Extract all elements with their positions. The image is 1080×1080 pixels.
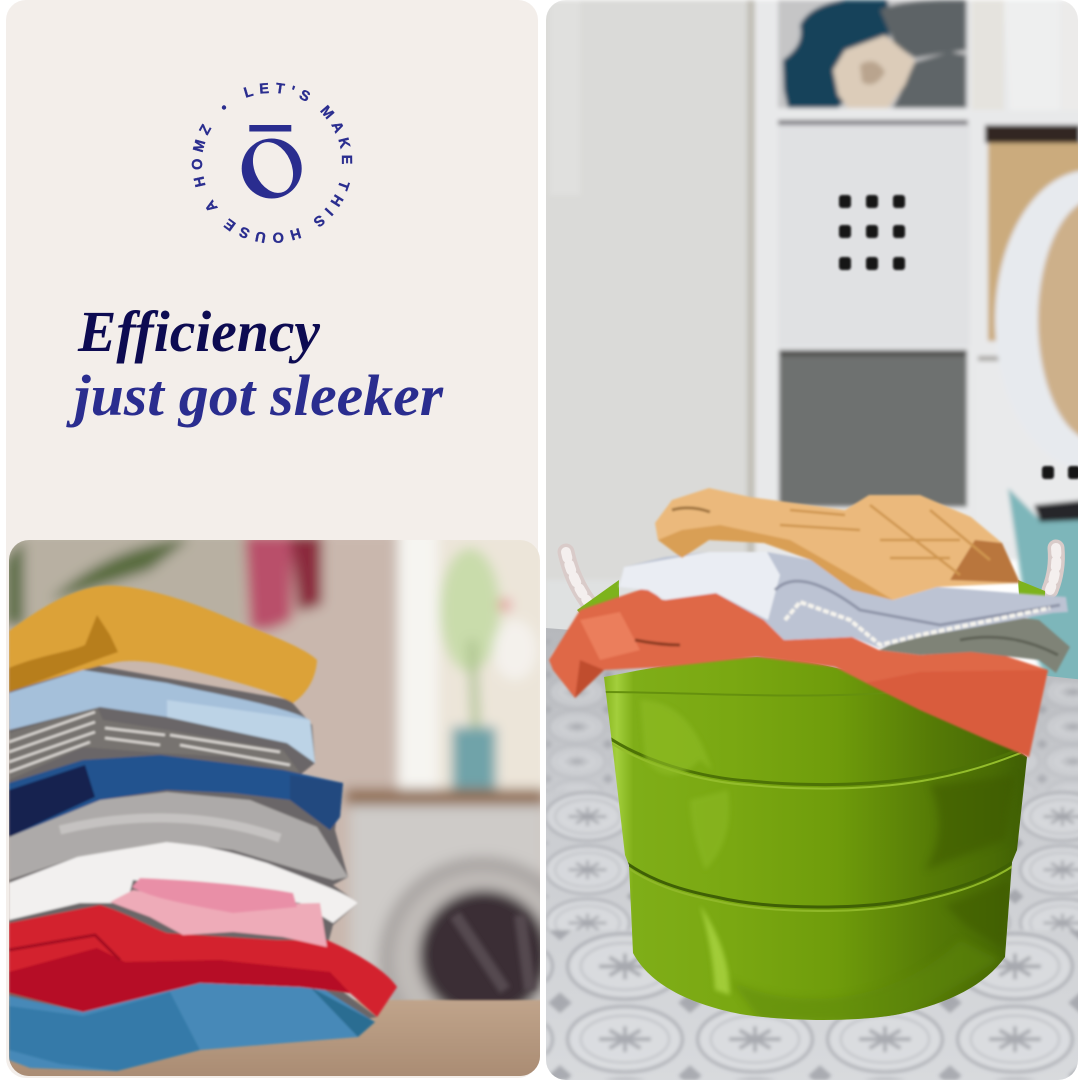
bucket highlights and shadows — [642, 702, 708, 773]
wooden table — [0, 1000, 550, 1080]
photo: stack of folded clothes — [9, 540, 540, 1076]
card background — [6, 0, 538, 1078]
logo dot separator — [222, 105, 226, 110]
green bucket — [577, 580, 1045, 1020]
heading — [66, 299, 443, 428]
folded dark towels — [783, 0, 890, 108]
logo: circular badge — [192, 82, 352, 244]
dark grey towel — [879, 613, 1070, 673]
bucket rim peeks — [577, 580, 1045, 613]
blurred room background — [9, 540, 540, 1076]
upper pink garment — [132, 878, 297, 913]
wicker bin — [985, 125, 1080, 143]
photo: laundry bucket room — [540, 0, 1080, 1080]
pile of towels — [549, 488, 1070, 757]
patterned floor — [546, 628, 1080, 1080]
wall — [540, 0, 750, 650]
shelving unit — [755, 0, 1080, 560]
clothes stack — [9, 585, 397, 1071]
peach knit towel — [655, 488, 1020, 600]
upper right bottles — [1004, 0, 1060, 110]
logo circular tagline: LET'S MAKE THIS HOUSE A HOMZ — [192, 82, 352, 244]
white garment — [9, 842, 358, 923]
denim garment — [9, 755, 343, 837]
mustard garment — [9, 585, 317, 703]
bucket body — [604, 657, 1027, 1020]
striped garment — [9, 707, 300, 780]
teal basket — [1008, 488, 1080, 695]
bucket shading clipped to body — [604, 692, 1030, 1020]
orange red towel — [549, 587, 1048, 757]
white cabinet door — [782, 128, 966, 130]
panel: brand card — [6, 0, 538, 1078]
lower pink garment — [110, 890, 327, 947]
blurred laundry room background — [540, 0, 1080, 695]
logo letter o — [242, 136, 302, 199]
bucket upper ribs — [605, 735, 1030, 785]
grey fabric bin — [779, 352, 967, 507]
light grey-blue towel — [619, 552, 1068, 648]
grey garment — [9, 792, 348, 880]
cabinet door holes — [839, 195, 1080, 479]
heading line two: just got sleeker — [66, 363, 443, 428]
blue bottom garment — [9, 983, 375, 1071]
washer drum detail — [455, 915, 530, 990]
light blue garment — [9, 668, 308, 732]
bucket rim band — [604, 692, 900, 696]
rope handles — [566, 548, 1056, 602]
logo macron bar — [249, 125, 291, 132]
heading line one: Efficiency — [77, 299, 320, 364]
washer door ring — [992, 168, 1078, 364]
red garment — [9, 905, 397, 1017]
bucket lower ribs — [625, 860, 1016, 907]
stack shadow underlay — [9, 665, 377, 1020]
